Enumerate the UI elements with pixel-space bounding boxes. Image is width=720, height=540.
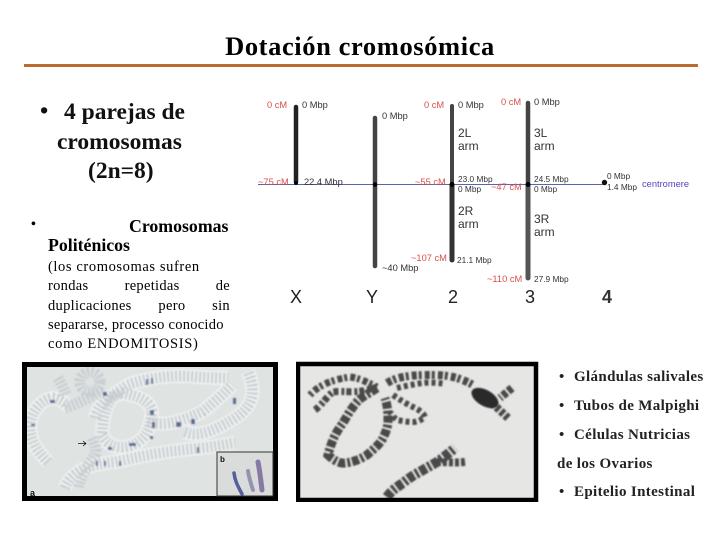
line 2: cromosomas: [57, 129, 182, 155]
chromosome 3: 24.5 Mbp: [534, 174, 569, 184]
text block: tissues list: [557, 369, 704, 500]
item: malpighian tubes: •: [559, 398, 565, 414]
chromosome X: X: [290, 287, 302, 307]
photo: polytene chromosomes in colour: [22, 362, 278, 501]
item: salivary glands: •: [559, 369, 565, 385]
bullet: •: [40, 98, 48, 124]
chromosome 3: arm: [534, 139, 555, 153]
chromosome X: 0 cM: [267, 100, 287, 110]
label a: a: [30, 488, 36, 498]
title: Dotación cromosómica: [225, 31, 495, 61]
chromosome 2: arm: [458, 139, 479, 153]
description: (los cromosomas sufren: [48, 259, 200, 275]
chromosome X: [258, 100, 343, 307]
text block: chromosome pairs: [40, 98, 185, 184]
chromosome 2: 23.0 Mbp: [458, 174, 493, 184]
chromosome Y: Y: [366, 287, 378, 307]
chromosome X: 22.4 Mbp: [304, 177, 343, 187]
chromosome Y: ~40 Mbp: [382, 263, 418, 273]
bullet: •: [31, 217, 36, 232]
item: nurse cells: •: [559, 427, 565, 443]
item: intestinal epithelium: •: [559, 484, 565, 500]
description: separarse, processo conocido: [48, 317, 224, 333]
chromosome 3: ~47 cM: [491, 182, 522, 192]
chromosome 2: 2R: [458, 204, 474, 218]
arrow: [78, 441, 86, 446]
text block: polytene chromosomes: [31, 216, 230, 352]
photo background: [24, 364, 276, 499]
item: salivary glands: Glándulas salivales: [574, 369, 704, 385]
chromosome 3: 3R: [534, 212, 550, 226]
chromosome 2: 0 cM: [424, 100, 444, 110]
description: rondas: [48, 278, 88, 294]
chromosome 3: 0 cM: [501, 97, 521, 107]
chromosome 3: 3L: [534, 126, 548, 140]
inset b: b: [220, 455, 225, 464]
chromosome Y: 0 Mbp: [382, 111, 408, 121]
chromosome 2: 2: [448, 287, 458, 307]
chromosome 2: 0 Mbp: [458, 184, 481, 194]
chromosome 3: 3: [525, 287, 535, 307]
heading line 1: Cromosomas: [129, 216, 228, 236]
photo frame: [298, 364, 536, 500]
item: nurse cells: Células Nutricias: [574, 427, 690, 443]
chromosome 3: 0 Mbp: [534, 97, 560, 107]
chromosome bands: [30, 372, 252, 488]
chromosome 2: 0 Mbp: [458, 100, 484, 110]
description: duplicaciones: [48, 298, 132, 314]
chromosome X: 0 Mbp: [302, 100, 328, 110]
centromere line: [258, 184, 606, 186]
dark heterochromatin blob: [468, 384, 502, 412]
chromosome 4: 1.4 Mbp: [607, 182, 637, 192]
chromosome 4: 0 Mbp: [607, 171, 630, 181]
line 3: (2n=8): [88, 158, 154, 184]
chromosome 2: 21.1 Mbp: [457, 255, 492, 265]
chromosome 3: ~110 cM: [487, 274, 522, 284]
item: ovaries: de los Ovarios: [557, 456, 653, 472]
chromosome 2: ~55 cM: [415, 177, 446, 187]
item: intestinal epithelium: Epitelio Intestinal: [574, 484, 695, 500]
photo frame: [24, 364, 276, 498]
photo: polytene chromosomes in black and white: [296, 362, 538, 502]
chromosome X: ~75 cM: [258, 177, 289, 187]
chromosome 4: [602, 171, 637, 307]
chromosome Y: [366, 111, 418, 307]
chromosome 2: 2L: [458, 126, 472, 140]
chromosome 2: arm: [458, 217, 479, 231]
chromosome 4: 4: [602, 287, 612, 307]
chromosome 2: ~107 cM: [411, 253, 447, 263]
description: [48, 259, 230, 352]
chromosome 2: [411, 100, 493, 307]
description: pero: [158, 298, 185, 314]
heading line 2: Politénicos: [48, 235, 130, 255]
chromosome 3: 0 Mbp: [534, 184, 557, 194]
dark blue bands: [31, 378, 236, 466]
description: repetidas: [125, 278, 180, 294]
banded chromosomes: [310, 375, 512, 497]
title underline: [24, 64, 698, 67]
description: sin: [212, 298, 230, 314]
chromosome 3: 27.9 Mbp: [534, 274, 569, 284]
description: de: [216, 278, 230, 294]
chromosome 3: arm: [534, 225, 555, 239]
photo background: [298, 364, 536, 500]
chart: chromosome map: [258, 97, 689, 307]
chromosome 3: [487, 97, 569, 307]
inset b: [217, 452, 273, 496]
centromere label: centromere: [642, 179, 689, 189]
description: como ENDOMITOSIS): [48, 336, 199, 352]
line 1: 4 parejas de: [64, 99, 185, 125]
item: malpighian tubes: Tubos de Malpighi: [574, 398, 699, 414]
